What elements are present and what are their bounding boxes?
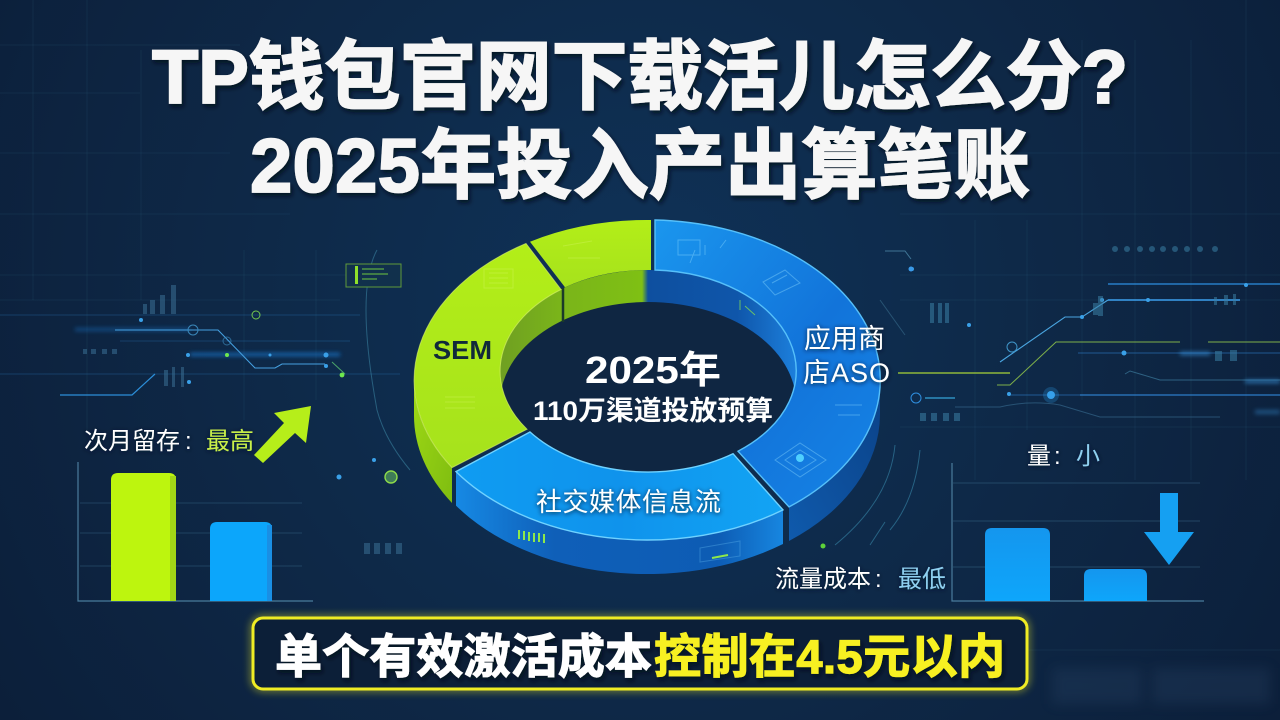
hole centre [502,302,794,472]
label: application store ASO [803,324,890,388]
left chart: next-month retention [78,462,313,601]
callout text: 控制在4.5元以内 [654,630,1005,683]
title: 2025年投入产出算笔账 [250,124,1030,209]
segment: social feed [456,432,783,540]
ring orbit accents [820,445,920,548]
centre subtitle: budget: 110万渠道投放预算 [533,396,773,426]
right chart top label: 小 [1076,443,1100,470]
left chart label: : [185,428,192,455]
right chart top label: : [1054,443,1061,470]
ring outer wall: ASO [789,380,880,541]
segment: SEM lime small [530,220,651,287]
icon: blue down arrow [1144,493,1194,565]
label: SEM: SEM [433,335,492,365]
segment: application store ASO [655,220,880,507]
left chart label: 最高 [206,428,254,455]
ring outer wall: social [456,472,783,574]
icon: lime up arrow [254,406,311,463]
right chart bottom label: : [875,566,882,593]
right chart bottom label: 流量成本 [775,566,871,593]
blurred watermark [1052,668,1270,704]
left chart label [84,428,254,455]
right chart top label [1027,443,1100,470]
right circuit lines [880,246,1280,421]
donut chart: budget allocation [414,220,890,574]
right chart bottom label [775,566,946,593]
callout: activation cost [253,618,1027,689]
bar: blue short [1084,569,1147,601]
bar: blue tall [985,528,1050,601]
left chart label: 次月留存 [84,428,180,455]
inner wall divider [562,288,564,322]
small green data chip [346,264,401,287]
callout text: 单个有效激活成本 [275,630,652,683]
right chart bottom label: 最低 [898,566,946,593]
label: application store ASO: 店ASO [803,358,890,388]
label: application store ASO: 应用商 [804,324,885,354]
centre heading: 2025: 2025年 [585,350,721,392]
label: social feed: 社交媒体信息流 [536,487,721,517]
title: TP钱包官网下载活儿怎么分? [152,35,1128,120]
title [152,35,1128,209]
segment: SEM lime large [414,244,561,468]
right chart top label: 量 [1027,443,1051,470]
ring inner wall [500,270,796,472]
bar: lime high [111,473,176,601]
bar: blue low [210,522,272,601]
callout text [275,630,1005,683]
ring outer wall: SEM [414,380,452,503]
right chart: traffic cost [952,463,1204,601]
left circuit lines [0,250,410,554]
ring surface line art [445,241,600,408]
